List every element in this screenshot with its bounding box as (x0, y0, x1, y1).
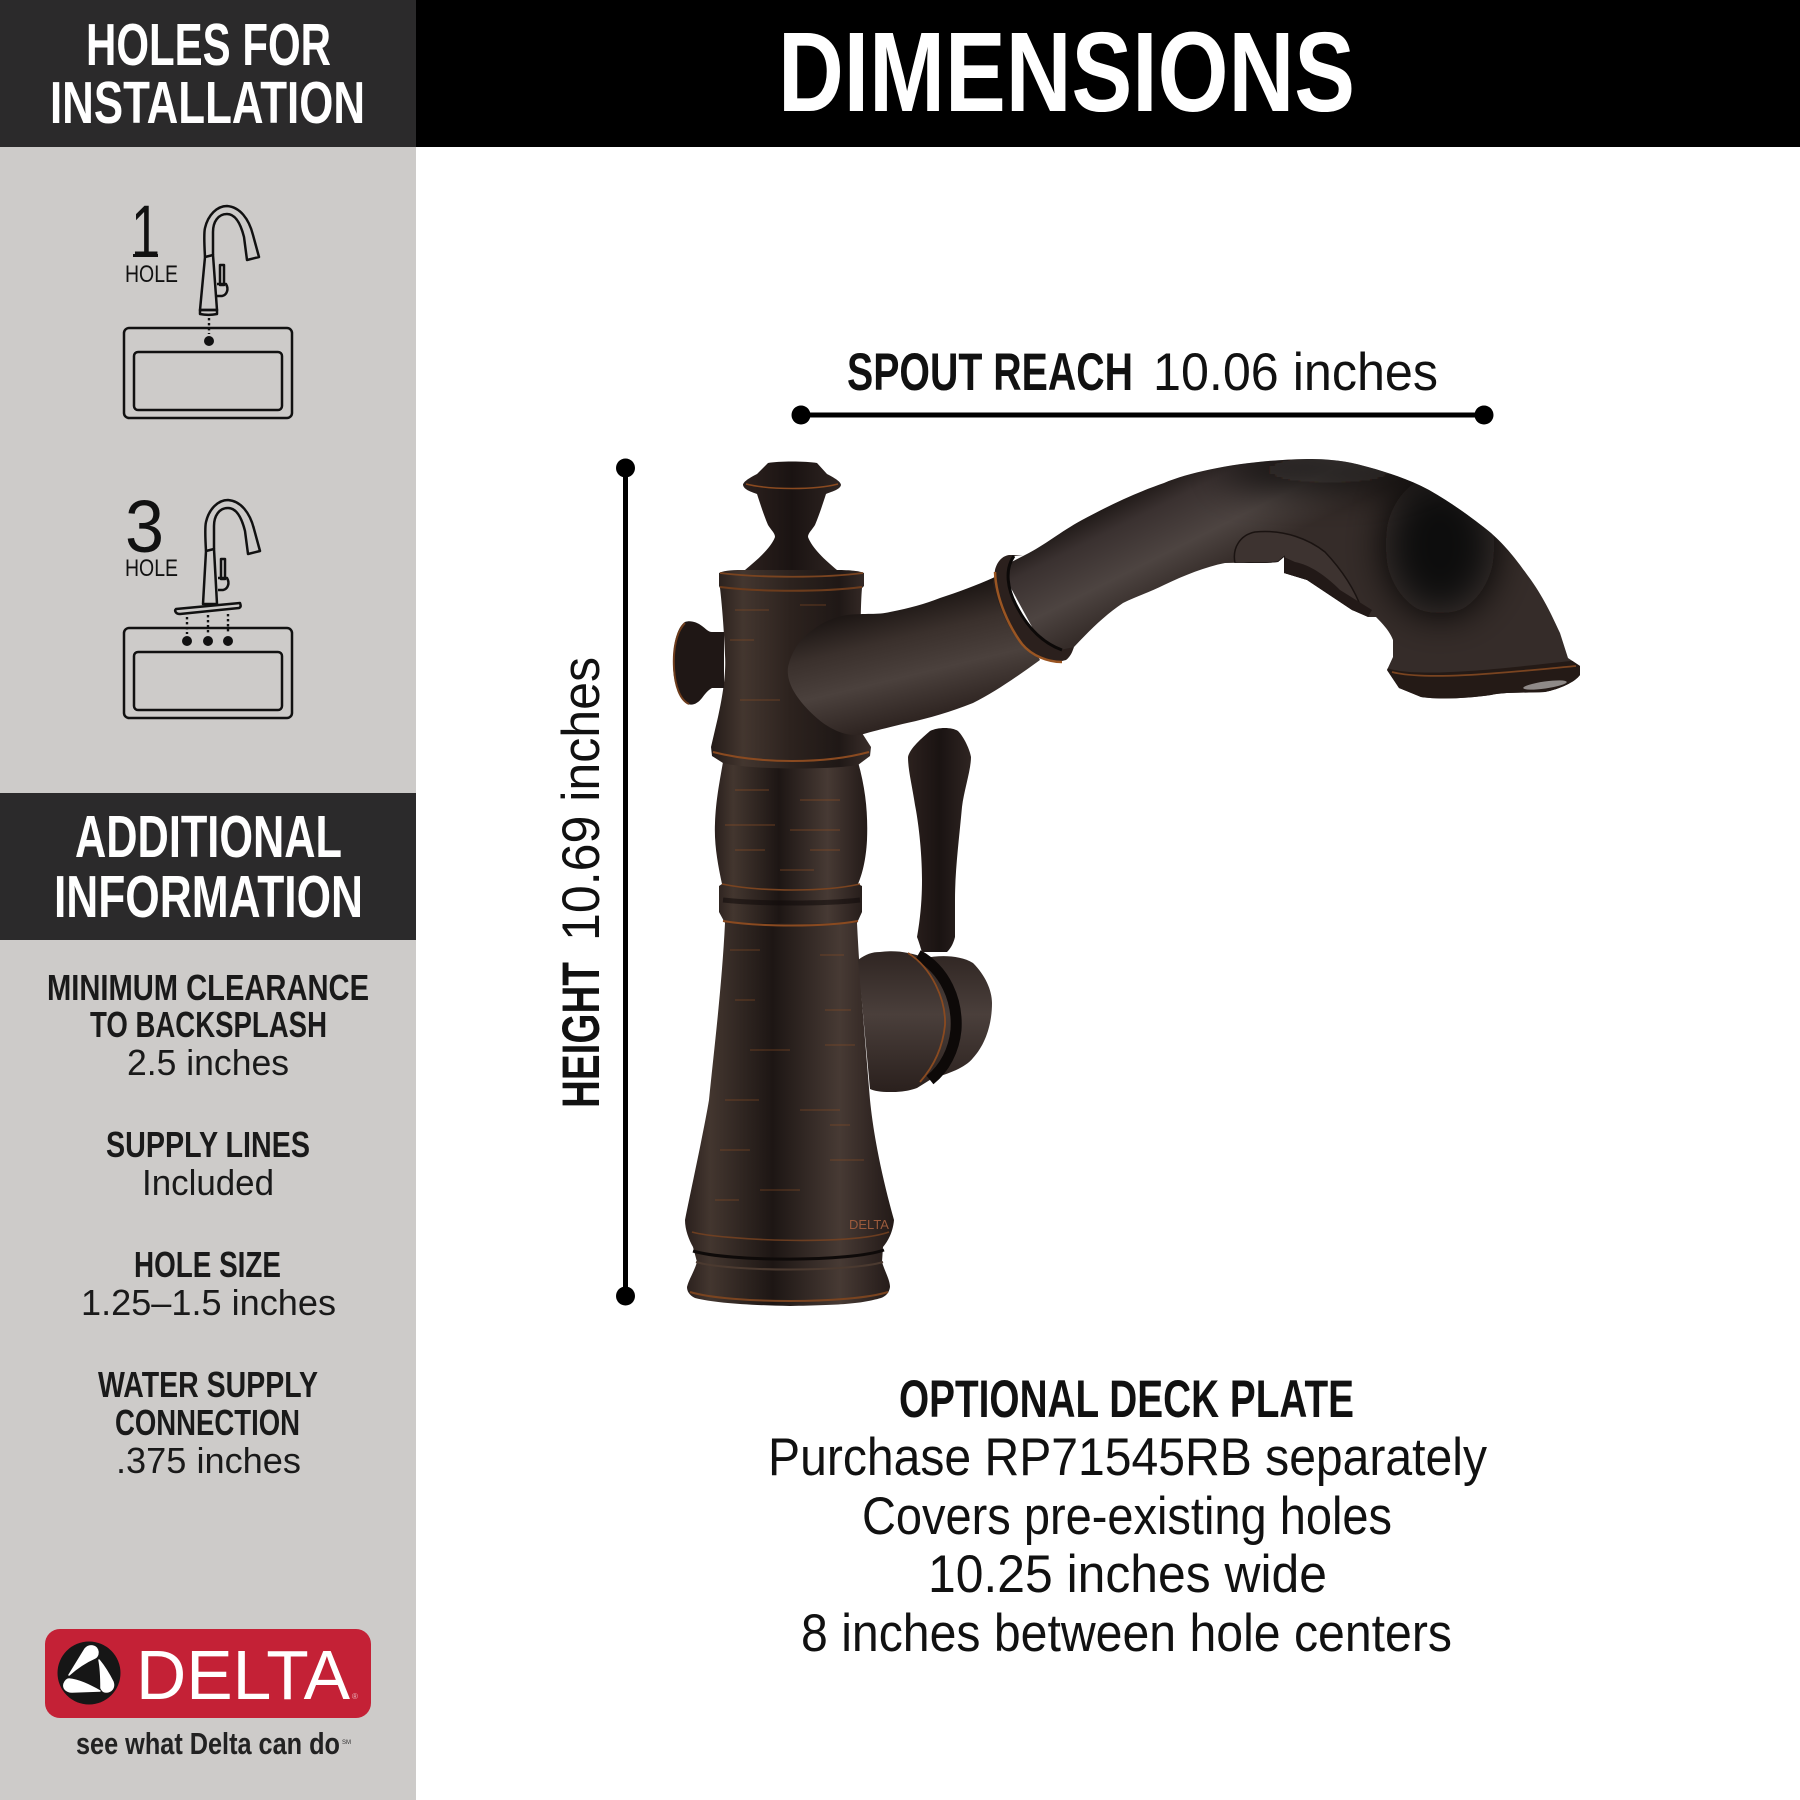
text: water supply connection: CONNECTION (115, 1402, 300, 1443)
dimension: height: HEIGHT (552, 962, 611, 1108)
dimension: height (552, 458, 635, 1306)
heading: holes for installation: INSTALLATION (50, 70, 365, 136)
panel: left sidebar (0, 0, 416, 1800)
icon: one hole installation (124, 190, 292, 418)
dimension: spout reach: 10.06 inches (1153, 343, 1438, 402)
text: minimum clearance: MINIMUM CLEARANCE (47, 967, 369, 1008)
icon: three hole installation: HOLE (125, 555, 178, 582)
icon: one hole installation: HOLE (125, 261, 178, 288)
icon: three hole installation (124, 485, 292, 718)
title: dimensions (416, 0, 1800, 147)
finial copper rim (746, 484, 838, 488)
logo: delta (45, 1629, 371, 1761)
dimension: spout reach (792, 343, 1494, 424)
heading: additional information: ADDITIONAL (75, 804, 342, 870)
lower bulb and ring (715, 762, 867, 926)
dimension: spout reach: SPOUT REACH (847, 343, 1133, 402)
title: dimensions: DIMENSIONS (778, 9, 1355, 135)
handle hub (858, 951, 992, 1092)
text: water supply connection (98, 1364, 318, 1481)
text: optional deck plate: 8 inches between hole centers (801, 1604, 1452, 1663)
dimension: height: 10.69 inches (552, 657, 611, 941)
text: water supply connection: WATER SUPPLY (98, 1364, 318, 1405)
spout collar (993, 555, 1074, 662)
spout head (1010, 459, 1580, 698)
text: hole size: HOLE SIZE (134, 1244, 281, 1285)
text: hole size: 1.25–1.5 inches (81, 1282, 336, 1323)
faucet illustration (673, 440, 1600, 1306)
upper body (711, 570, 871, 769)
lever handle (908, 728, 971, 952)
heading: holes for installation (0, 0, 416, 147)
text: supply lines: Included (142, 1162, 274, 1203)
text: optional deck plate: Covers pre-existing holes (862, 1487, 1392, 1546)
lower body and base (685, 923, 894, 1306)
text: optional deck plate (768, 1370, 1487, 1663)
icon: three hole installation: 3 (125, 485, 164, 568)
heading: holes for installation: HOLES FOR (86, 12, 331, 78)
icon: one hole installation: 1 (131, 190, 160, 273)
text: minimum clearance: TO BACKSPLASH (90, 1004, 327, 1045)
text: optional deck plate: Purchase RP71545RB separately (768, 1428, 1487, 1487)
text: optional deck plate: 10.25 inches wide (928, 1545, 1327, 1604)
text: minimum clearance (47, 967, 369, 1083)
spout base section (788, 577, 1040, 735)
logo: delta: see what Delta can do (76, 1726, 340, 1761)
text: supply lines: SUPPLY LINES (106, 1124, 310, 1165)
finial (743, 462, 841, 570)
text: optional deck plate: OPTIONAL DECK PLATE (899, 1370, 1354, 1429)
text: supply lines (106, 1124, 310, 1203)
text: minimum clearance: 2.5 inches (127, 1042, 289, 1083)
logo: delta: ® (352, 1692, 358, 1701)
text: water supply connection: .375 inches (116, 1440, 301, 1481)
text: hole size (81, 1244, 336, 1323)
heading: additional information (0, 793, 416, 940)
logo: delta: DELTA (136, 1636, 350, 1714)
logo: delta: SM (342, 1740, 351, 1746)
heading: additional information: INFORMATION (54, 864, 363, 930)
side knob (673, 621, 724, 705)
lower body and base: DELTA (849, 1217, 889, 1232)
